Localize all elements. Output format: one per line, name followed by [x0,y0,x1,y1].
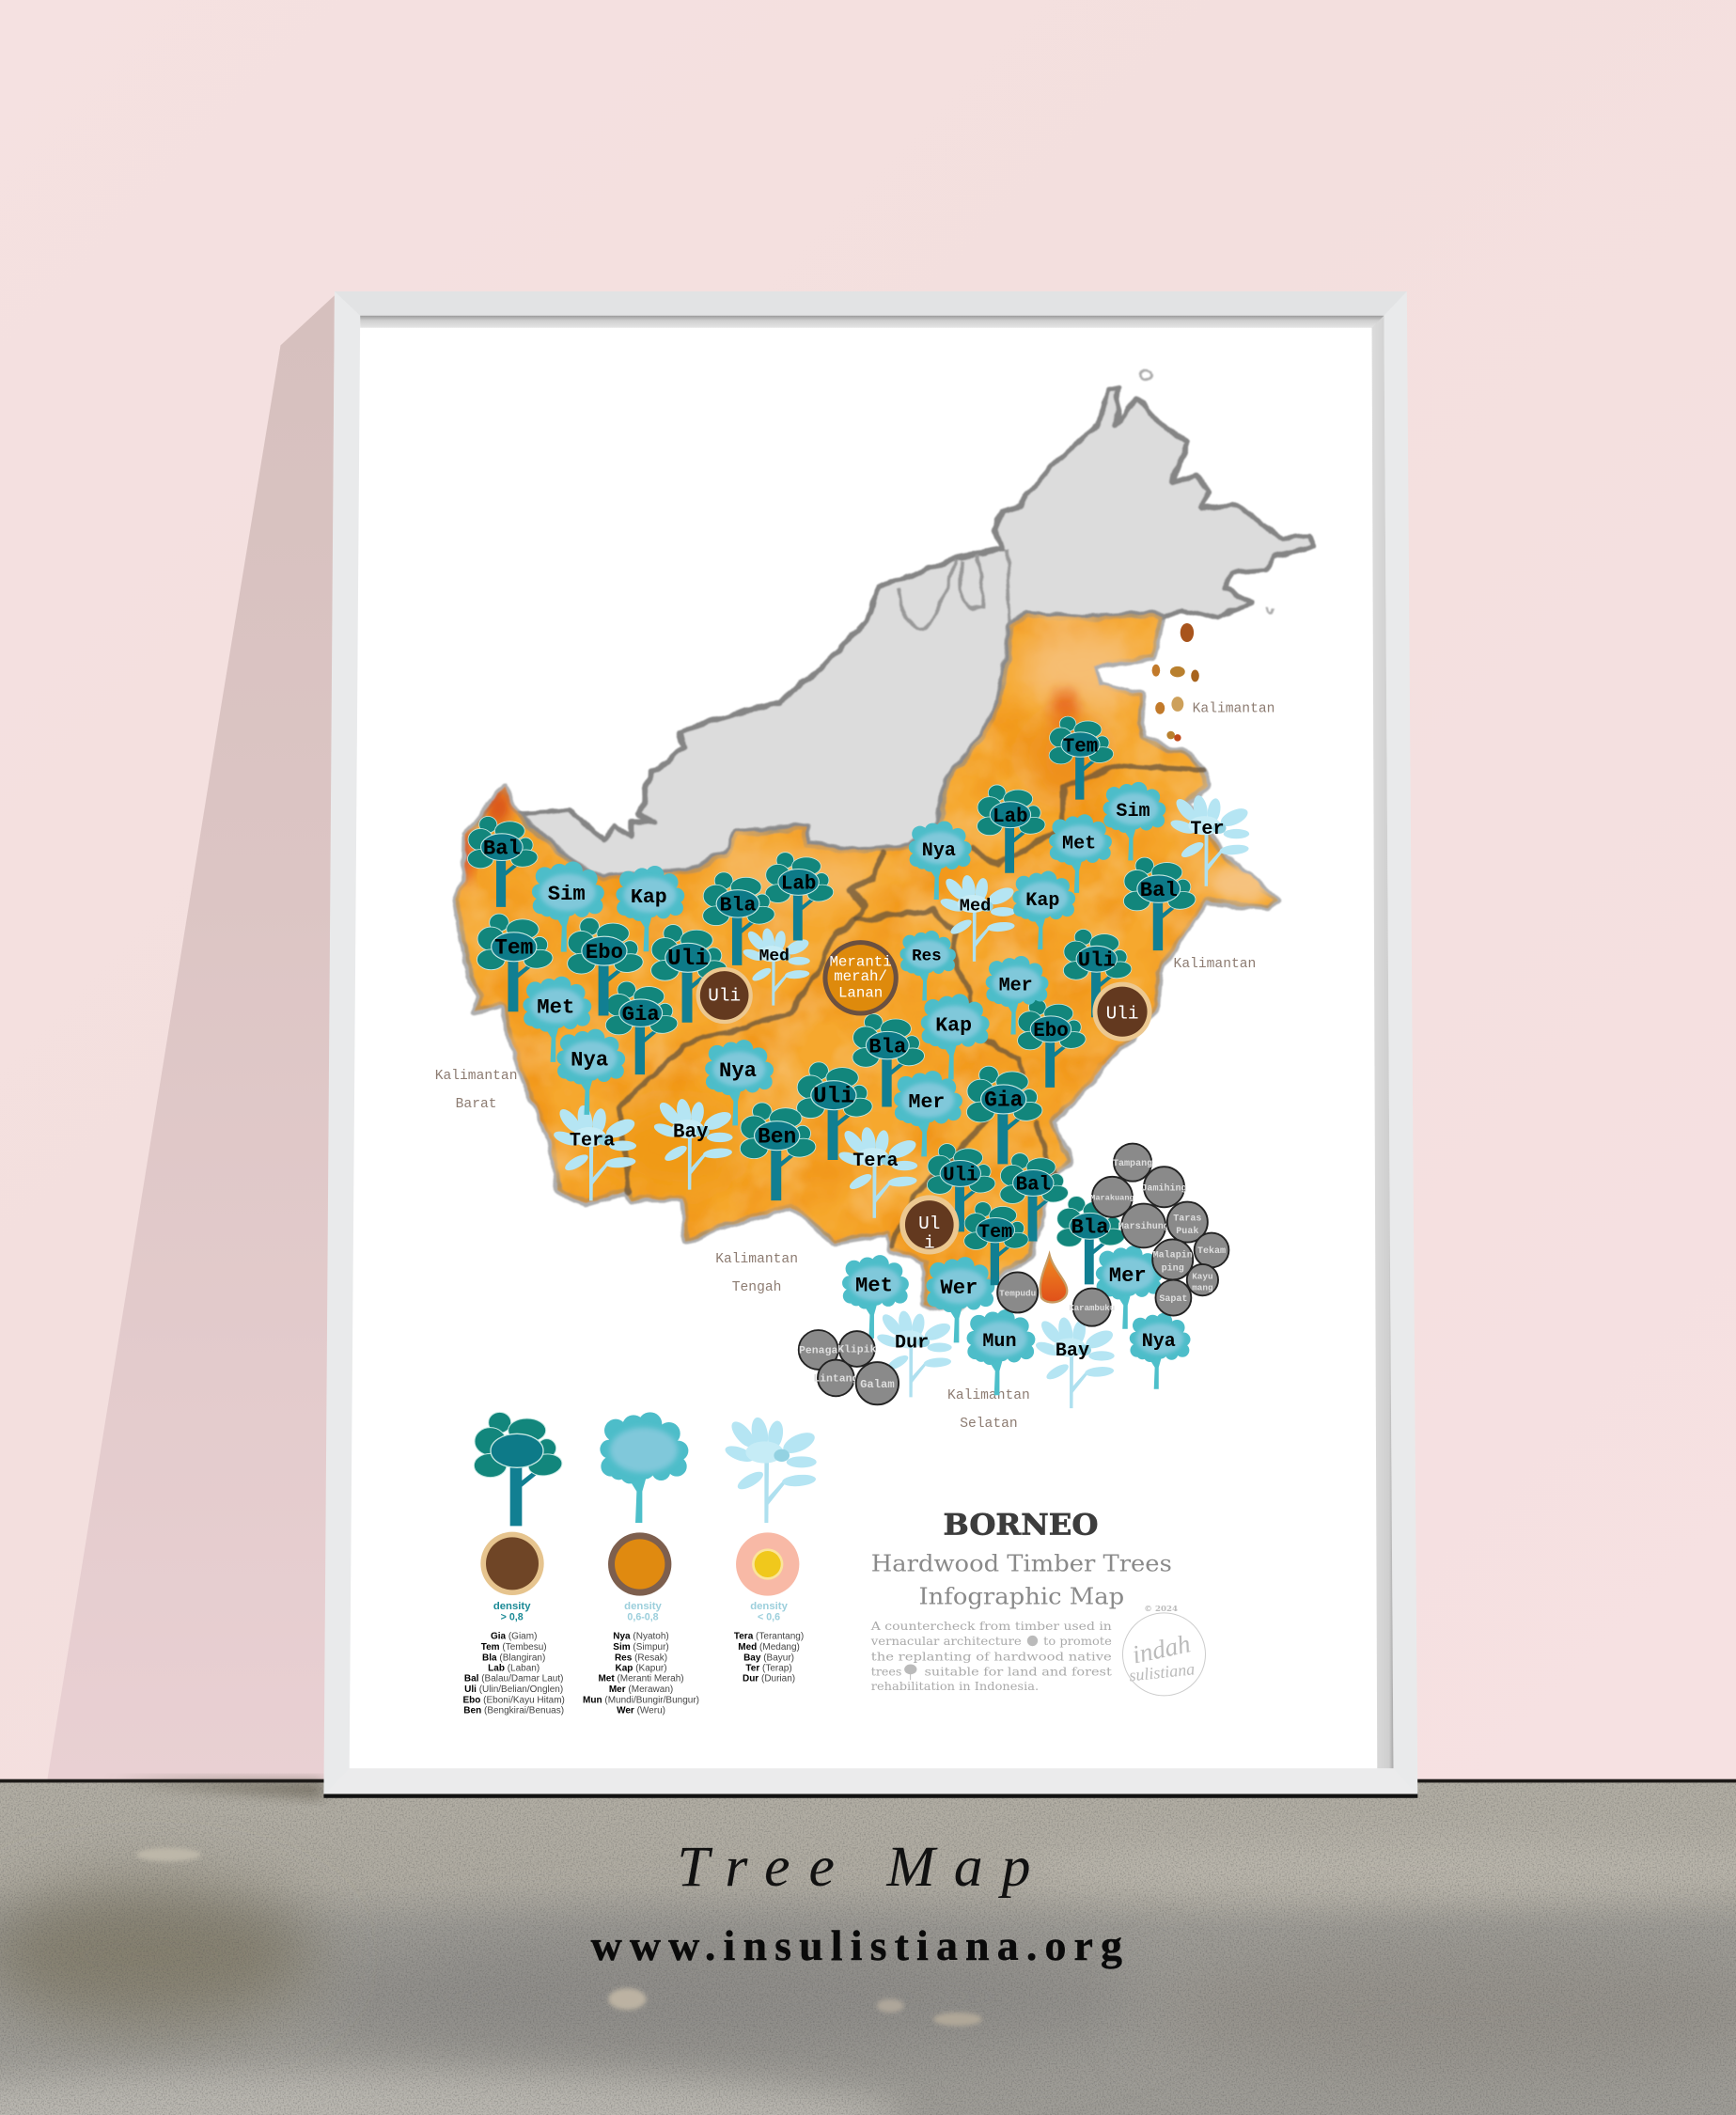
tree Res [899,931,956,1000]
marker Marsihung [1118,1204,1169,1247]
wood marker: Uli south [899,1195,959,1255]
tree Bay south [1034,1316,1116,1408]
wood marker: Meranti merah / Lanan: merah/ [834,968,887,985]
islands off north Kalimantan [1152,623,1199,742]
tree Bay south: Bay [1056,1340,1089,1362]
marker Marakuang [1090,1177,1134,1217]
tree Bla southeast [1056,1197,1126,1284]
tree Kap central [921,994,990,1080]
tree Kap east [1012,871,1075,949]
marker Malapin ping [1152,1239,1193,1279]
legend column: density above 0.8: Gia (Giam) [491,1631,537,1641]
legend column: density above 0.8: > 0,8 [501,1612,524,1623]
marker Galam [856,1362,899,1404]
tree Uli west [651,925,727,1023]
legend column: density below 0.6: Ter (Terap) [745,1664,792,1674]
tree Tera central: Tera [852,1151,898,1172]
tree Lab west [765,853,835,940]
legend column: density below 0.6: Bay (Bayur) [743,1653,794,1663]
description: rehabilitation in Indonesia. [871,1680,1039,1693]
marker Tampang: Tampang [1113,1159,1152,1169]
marker Tempudu: Tempudu [999,1288,1036,1298]
tree Gia west [605,981,679,1074]
caption: Tree Map: Tree Map [677,1835,1030,1899]
legend column: density above 0.8: Bal (Balau/Damar Laut) [464,1674,563,1684]
description: A countercheck from timber used in [870,1620,1112,1633]
frame shadow on wall [47,295,335,1780]
tree Gia west: Gia [622,1002,660,1026]
subtitle: Infographic Map [918,1584,1124,1610]
tree Dur [875,1309,953,1397]
marker Penaga [799,1330,838,1370]
tree Nya north: Nya [922,840,956,862]
legend column: density 0.6 to 0.8 [583,1412,699,1716]
marker Lintang: Lintang [813,1372,859,1385]
marker Karambuku: Karambuku [1069,1303,1115,1313]
tree Mun: Mun [982,1331,1017,1353]
marker Marsihung: Marsihung [1118,1221,1169,1232]
legend column: density 0.6 to 0.8: Nya (Nyatoh) [613,1631,669,1641]
legend column: density above 0.8: Lab (Laban) [488,1664,540,1674]
marker Malapin ping: Malapin [1153,1249,1193,1261]
tree Nya south: Nya [1142,1331,1176,1353]
tree Lab north [977,785,1046,873]
copyright: © 2024 [1144,1605,1178,1614]
tree Sim north: Sim [1116,801,1150,822]
tree Lab west: Lab [781,874,816,896]
island: Laut [1040,1255,1067,1302]
tree Nya west: Nya [571,1048,608,1073]
tree Tem north: Tem [1063,736,1098,758]
tree Nya north [909,821,972,900]
tree Mer southeast: Mer [1109,1263,1147,1288]
signature logo [1122,1613,1205,1696]
tree Kap east: Kap [1025,890,1059,912]
tree Mun [967,1309,1035,1395]
region label: Kalimantan Tengah [715,1252,798,1295]
trees on the map [467,716,1250,1408]
tree Uli east [1063,929,1133,1017]
legend column: density 0.6 to 0.8: density [624,1601,663,1612]
tree Bal south [1000,1153,1070,1241]
wood marker: Uli west: Uli [708,986,741,1007]
legend column: density below 0.6: density [750,1601,789,1612]
legend column: density 0.6 to 0.8: Sim (Simpur) [613,1642,669,1653]
marker Sapat: Sapat [1159,1294,1187,1305]
tree Sim west [532,861,604,952]
tree Bla west [703,872,775,965]
tree Met north [1049,814,1112,893]
legend column: density below 0.6: Tera (Terantang) [734,1631,804,1641]
tree Met west [523,977,591,1062]
marker Sapat [1155,1280,1191,1316]
tree Sim north [1103,782,1165,860]
tree Ben: Ben [758,1124,796,1149]
tree Uli east: Uli [1078,948,1116,972]
tree Tera west: Tera [570,1130,615,1152]
tree Bla central [852,1014,926,1107]
tree Bal east: Bal [1140,878,1178,902]
marker Kayu mang: mang [1192,1283,1213,1293]
tree Met south [842,1255,909,1339]
marker Kayu mang: Kayu [1192,1271,1213,1281]
tree Med east [939,874,1016,962]
tree Bla central: Bla [868,1034,906,1058]
tree Mer central [894,1071,962,1156]
wood marker: Uli east [1092,982,1152,1042]
tree Bay central: Bay [673,1122,709,1144]
tree Mer central: Mer [909,1091,945,1114]
region label: Kalimantan Tengah: Kalimantan [715,1252,798,1267]
marker Galam: Galam [860,1378,895,1391]
marker Kayu mang [1187,1264,1218,1295]
tree Ter [1169,794,1250,886]
marker Klipik [837,1331,876,1367]
tree Bay central [652,1098,734,1190]
tree Bal south: Bal [1016,1175,1051,1197]
tree Met west: Met [537,995,574,1020]
tree Tera central [837,1126,918,1218]
description: suitable for land and forest [924,1666,1112,1679]
tree Mer southeast [1096,1246,1163,1329]
tree Nya south [1130,1313,1191,1389]
region label: Kalimantan Selatan [947,1388,1030,1432]
legend column: density above 0.8: Tem (Tembesu) [481,1642,547,1653]
tree Tem south: Tem [978,1222,1012,1244]
tree Nya west [556,1029,625,1115]
legend column: density above 0.8: Bla (Blangiran) [482,1653,545,1663]
subtitle: Hardwood Timber Trees [871,1551,1172,1577]
tree Sim west: Sim [548,882,586,906]
legend column: density above 0.8 [462,1412,565,1716]
tree Met north: Met [1062,834,1096,855]
subtitle [871,1551,1172,1610]
tree Kap central: Kap [935,1014,972,1037]
legend column: density 0.6 to 0.8: 0,6-0,8 [627,1612,659,1623]
legend column: density below 0.6: < 0,6 [758,1612,780,1623]
legend column: density 0.6 to 0.8: Mer (Merawan) [609,1684,673,1695]
legend column: density below 0.6: Dur (Durian) [743,1674,795,1684]
region label: Kalimantan Tengah: Tengah [732,1280,781,1295]
legend column: density above 0.8: Ebo (Eboni/Kayu Hitam) [462,1696,565,1706]
tree Dur: Dur [895,1333,929,1355]
region label: Kalimantan Barat [435,1069,517,1112]
description: to promote [1043,1635,1112,1648]
marker Lintang [813,1360,859,1396]
legend column: density below 0.6 [723,1416,818,1684]
picture frame [323,291,1417,1798]
tree Bla southeast: Bla [1071,1215,1109,1240]
tree Ben [740,1103,817,1200]
wood marker: Uli east: Uli [1106,1003,1138,1024]
signature logo: indah [1130,1629,1193,1669]
wood marker: Meranti merah / Lanan: Lanan [838,984,883,1001]
signature logo: sulistiana [1128,1659,1196,1685]
tree Bal west: Bal [483,836,521,860]
province borders [619,765,1203,1246]
map: Kalimantan in watercolour orange [446,607,1295,1322]
tree Met south: Met [855,1273,893,1297]
tree Gia central: Gia [984,1089,1024,1113]
marker Tempudu [997,1272,1038,1312]
tree Mer east: Mer [999,975,1033,996]
caption: website: www.insulistiana.org [591,1921,1122,1969]
tree Uli west: Uli [667,947,709,972]
grey vernacular timber markers [799,1144,1228,1404]
marker Tekam: Tekam [1197,1246,1226,1257]
tree Ebo west [568,917,644,1016]
region label: Kalimantan Utara: Kalimantan [1193,702,1275,717]
marker Tampang [1113,1144,1152,1182]
tree Tera west [552,1104,637,1200]
tree Lab north: Lab [993,807,1028,828]
tree Uli south [927,1144,996,1231]
tree Wer [926,1257,994,1342]
wood marker: Meranti merah / Lanan [822,940,899,1016]
tree Med west [742,928,811,1006]
marker Karambuku [1069,1289,1115,1326]
tree Tem north [1049,716,1115,800]
region label: Kalimantan Selatan: Selatan [960,1417,1018,1432]
description: trees [871,1666,901,1679]
tree Bal west [467,816,539,907]
region label: Kalimantan Barat: Kalimantan [435,1069,517,1084]
tree Gia central [966,1066,1043,1164]
legend column: density 0.6 to 0.8: Wer (Weru) [617,1706,665,1716]
tree Bla west: Bla [720,895,756,917]
marker Penaga: Penaga [799,1345,837,1357]
marker Marakuang: Marakuang [1090,1193,1134,1202]
description [870,1620,1112,1693]
marker Tekam [1195,1233,1228,1267]
legend column: density 0.6 to 0.8: Res (Resak) [615,1653,667,1663]
tree Wer: Wer [940,1276,977,1300]
tree Mer east [986,956,1048,1035]
tree Uli south: Uli [943,1166,978,1187]
legend column: density above 0.8: Uli (Ulin/Belian/Onglen) [464,1684,563,1695]
legend column: density below 0.6: Med (Medang) [738,1642,800,1653]
map: Malaysia and Brunei in grey [518,369,1314,878]
description: the replanting of hardwood native [871,1651,1112,1664]
legend [462,1412,818,1716]
floor [0,1779,1736,2115]
tree Tem west [477,914,554,1011]
tree Kap west: Kap [631,886,667,909]
tree Med east: Med [960,896,991,916]
wood marker: Meranti merah / Lanan: Meranti [829,953,892,970]
description: vernacular architecture [870,1635,1022,1648]
tree Ebo east: Ebo [1033,1021,1069,1042]
tree Uli central: Uli [813,1084,854,1109]
tree Bal east [1123,857,1196,950]
tree Kap west [616,866,684,951]
tree Nya central [705,1040,774,1125]
tree Ebo east [1018,999,1087,1088]
region label: Kalimantan Timur: Kalimantan [1174,957,1256,972]
wood marker: Uli south: i [924,1232,935,1253]
marker Taras Puak [1167,1202,1208,1243]
tree Res: Res [912,948,942,966]
legend column: density above 0.8: density [493,1601,531,1612]
marker Klipik: Klipik [837,1344,876,1356]
region label: Kalimantan Barat: Barat [456,1097,497,1112]
marker Jamihing: Jamihing [1141,1183,1187,1194]
legend column: density 0.6 to 0.8: Mun (Mundi/Bungir/Bungur) [583,1696,699,1706]
tree Tem west: Tem [494,936,533,961]
marker Taras Puak: Taras [1173,1214,1201,1225]
tree Tem south [964,1202,1029,1285]
region label: Kalimantan Selatan: Kalimantan [947,1388,1030,1403]
title: BORNEO [943,1509,1098,1543]
wood marker: Uli south: Ul [918,1214,940,1234]
title block [870,1509,1205,1696]
marker Taras Puak: Puak [1176,1226,1198,1237]
tree Ebo west: Ebo [586,940,623,964]
legend column: density above 0.8: Ben (Bengkirai/Benuas) [463,1706,564,1716]
tree Med west: Med [759,948,790,966]
wood marker: Uli west [696,967,753,1024]
legend column: density 0.6 to 0.8: Kap (Kapur) [616,1664,667,1674]
legend column: density 0.6 to 0.8: Met (Meranti Merah) [598,1674,684,1684]
tree Ter: Ter [1190,819,1225,840]
tree Uli central [797,1062,873,1160]
marker Jamihing [1141,1167,1187,1207]
marker Malapin ping: ping [1162,1263,1184,1275]
tree Nya central: Nya [719,1058,757,1083]
